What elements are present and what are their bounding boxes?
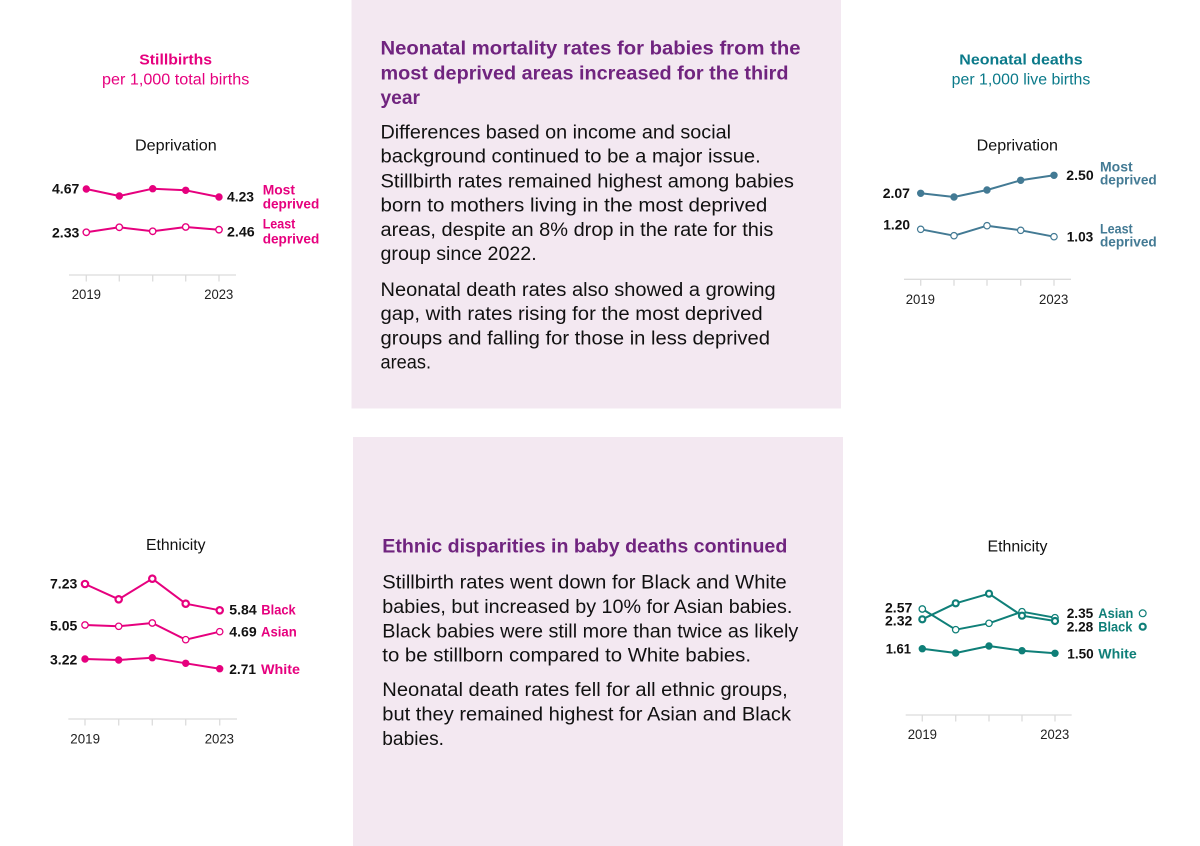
data values: 7.23 <box>50 575 78 591</box>
line: least deprived <box>83 224 222 236</box>
series labels <box>1100 159 1157 249</box>
line: Asian <box>919 606 1058 633</box>
heading: neonatal mortality <box>380 38 801 109</box>
data values: 3.22 <box>50 651 78 667</box>
text block: deprivation differences <box>380 123 794 265</box>
data values: 2.35 <box>1067 605 1094 621</box>
data values: 2.46 <box>227 223 255 239</box>
line: Black <box>82 576 223 614</box>
series labels: Most <box>263 181 295 197</box>
data values <box>52 180 255 240</box>
year labels: 2019 <box>72 286 101 302</box>
line: least deprived <box>918 222 1057 240</box>
line: Black <box>919 591 1058 624</box>
series labels <box>261 601 300 677</box>
text block: neonatal gap <box>380 280 776 373</box>
series labels: Least <box>263 216 296 232</box>
column heading: stillbirths <box>102 52 250 88</box>
year labels: 2019 <box>906 291 935 307</box>
series labels: Most <box>1100 159 1133 175</box>
legend markers <box>1139 610 1146 630</box>
series labels <box>263 181 319 246</box>
series labels: deprived <box>1100 172 1157 188</box>
text block: neonatal gap: areas. <box>380 352 431 373</box>
text block: stillbirth by ethnicity: Stillbirth rates went down for Black and White <box>382 573 787 594</box>
data values: 5.05 <box>50 617 78 633</box>
column heading: neonatal deaths <box>952 52 1091 88</box>
data values: 4.67 <box>52 180 80 196</box>
data values <box>885 599 1094 661</box>
column heading: neonatal deaths: Neonatal deaths <box>959 52 1083 69</box>
line: White <box>82 654 223 672</box>
year labels <box>70 730 234 746</box>
data values: 2.28 <box>1067 618 1094 634</box>
column heading: neonatal deaths: per 1,000 live births <box>952 71 1091 88</box>
series labels: deprived <box>263 196 319 212</box>
text block: deprivation differences: group since 2022. <box>380 244 537 265</box>
heading: ethnic disparities: Ethnic disparities in baby deaths continued <box>382 536 787 558</box>
series labels: Black <box>261 601 296 617</box>
year labels: 2019 <box>70 730 100 746</box>
data values: 2.50 <box>1066 167 1094 183</box>
data values: 2.33 <box>52 224 80 240</box>
heading: neonatal mortality: year <box>380 87 420 109</box>
series labels <box>1098 605 1137 661</box>
text block: neonatal by ethnicity: Neonatal death rates fell for all ethnic groups, <box>382 680 788 701</box>
year labels: 2023 <box>205 730 234 746</box>
text block: deprivation differences: areas, despite an 8% drop in the rate for this <box>380 220 773 241</box>
text block: deprivation differences: background continued to be a major issue. <box>380 147 761 168</box>
year labels: 2023 <box>204 286 233 302</box>
text block: neonatal gap: Neonatal death rates also showed a growing <box>380 280 776 301</box>
data values <box>50 575 257 677</box>
year labels: 2023 <box>1039 291 1068 307</box>
chart title: Deprivation <box>977 138 1058 155</box>
data values: 1.50 <box>1067 645 1094 661</box>
year labels <box>908 726 1069 742</box>
text block: neonatal gap: groups and falling for those in less deprived <box>380 328 770 349</box>
data values: 2.71 <box>229 661 256 677</box>
year labels <box>906 291 1068 307</box>
year labels: 2019 <box>908 726 937 742</box>
column heading: stillbirths: per 1,000 total births <box>102 71 250 88</box>
text block: neonatal by ethnicity: but they remained highest for Asian and Black <box>382 705 792 726</box>
series labels: Least <box>1100 220 1133 236</box>
heading: neonatal mortality: most deprived areas increased for the third <box>380 62 788 84</box>
data values: 1.61 <box>886 641 911 657</box>
panel: deprivation text <box>352 0 841 408</box>
series labels: White <box>1098 645 1137 661</box>
series labels: White <box>261 661 300 677</box>
series labels: Black <box>1098 618 1132 634</box>
line: most deprived <box>918 172 1057 200</box>
series labels: Asian <box>261 624 297 640</box>
series labels: Asian <box>1098 605 1133 621</box>
chart title: Ethnicity <box>988 538 1048 556</box>
year labels: 2023 <box>1040 726 1069 742</box>
panel: ethnicity text <box>353 437 843 846</box>
series labels: deprived <box>263 230 319 246</box>
text block: deprivation differences: Differences based on income and social <box>380 123 731 144</box>
text block: stillbirth by ethnicity <box>382 573 799 666</box>
line: Asian <box>82 620 223 643</box>
data values: 2.07 <box>883 185 910 201</box>
data values: 4.69 <box>229 624 257 640</box>
data values: 1.03 <box>1067 229 1094 245</box>
chart: stillbirths by ethnicity <box>50 537 300 746</box>
chart: neonatal deaths by ethnicity <box>885 538 1146 742</box>
data values: 4.23 <box>227 188 254 204</box>
text block: stillbirth by ethnicity: to be stillborn compared to White babies. <box>382 645 751 666</box>
chart title: Ethnicity <box>146 537 206 554</box>
text block: stillbirth by ethnicity: babies, but increased by 10% for Asian babies. <box>382 597 792 618</box>
column heading: stillbirths: Stillbirths <box>139 52 212 69</box>
data values: 1.20 <box>883 216 910 232</box>
chart: stillbirths by deprivation <box>52 138 319 302</box>
text block: deprivation differences: born to mothers living in the most deprived <box>380 196 767 216</box>
text block: deprivation differences: Stillbirth rates remained highest among babies <box>380 171 794 192</box>
text block: stillbirth by ethnicity: Black babies were still more than twice as likely <box>382 621 799 642</box>
data values: 2.32 <box>885 613 913 629</box>
line: White <box>919 643 1058 656</box>
chart title: Deprivation <box>135 138 217 155</box>
line: most deprived <box>83 186 222 200</box>
data values <box>883 167 1094 245</box>
series labels: deprived <box>1100 233 1157 249</box>
heading: neonatal mortality: Neonatal mortality rates for babies from the <box>380 38 801 60</box>
text block: neonatal gap: gap, with rates rising for the most deprived <box>380 304 763 325</box>
chart: neonatal deaths by deprivation <box>883 138 1157 307</box>
text block: neonatal by ethnicity <box>382 680 792 750</box>
data values: 2.57 <box>885 599 913 615</box>
year labels <box>72 286 233 302</box>
text block: neonatal by ethnicity: babies. <box>382 729 444 750</box>
data values: 5.84 <box>229 601 257 617</box>
